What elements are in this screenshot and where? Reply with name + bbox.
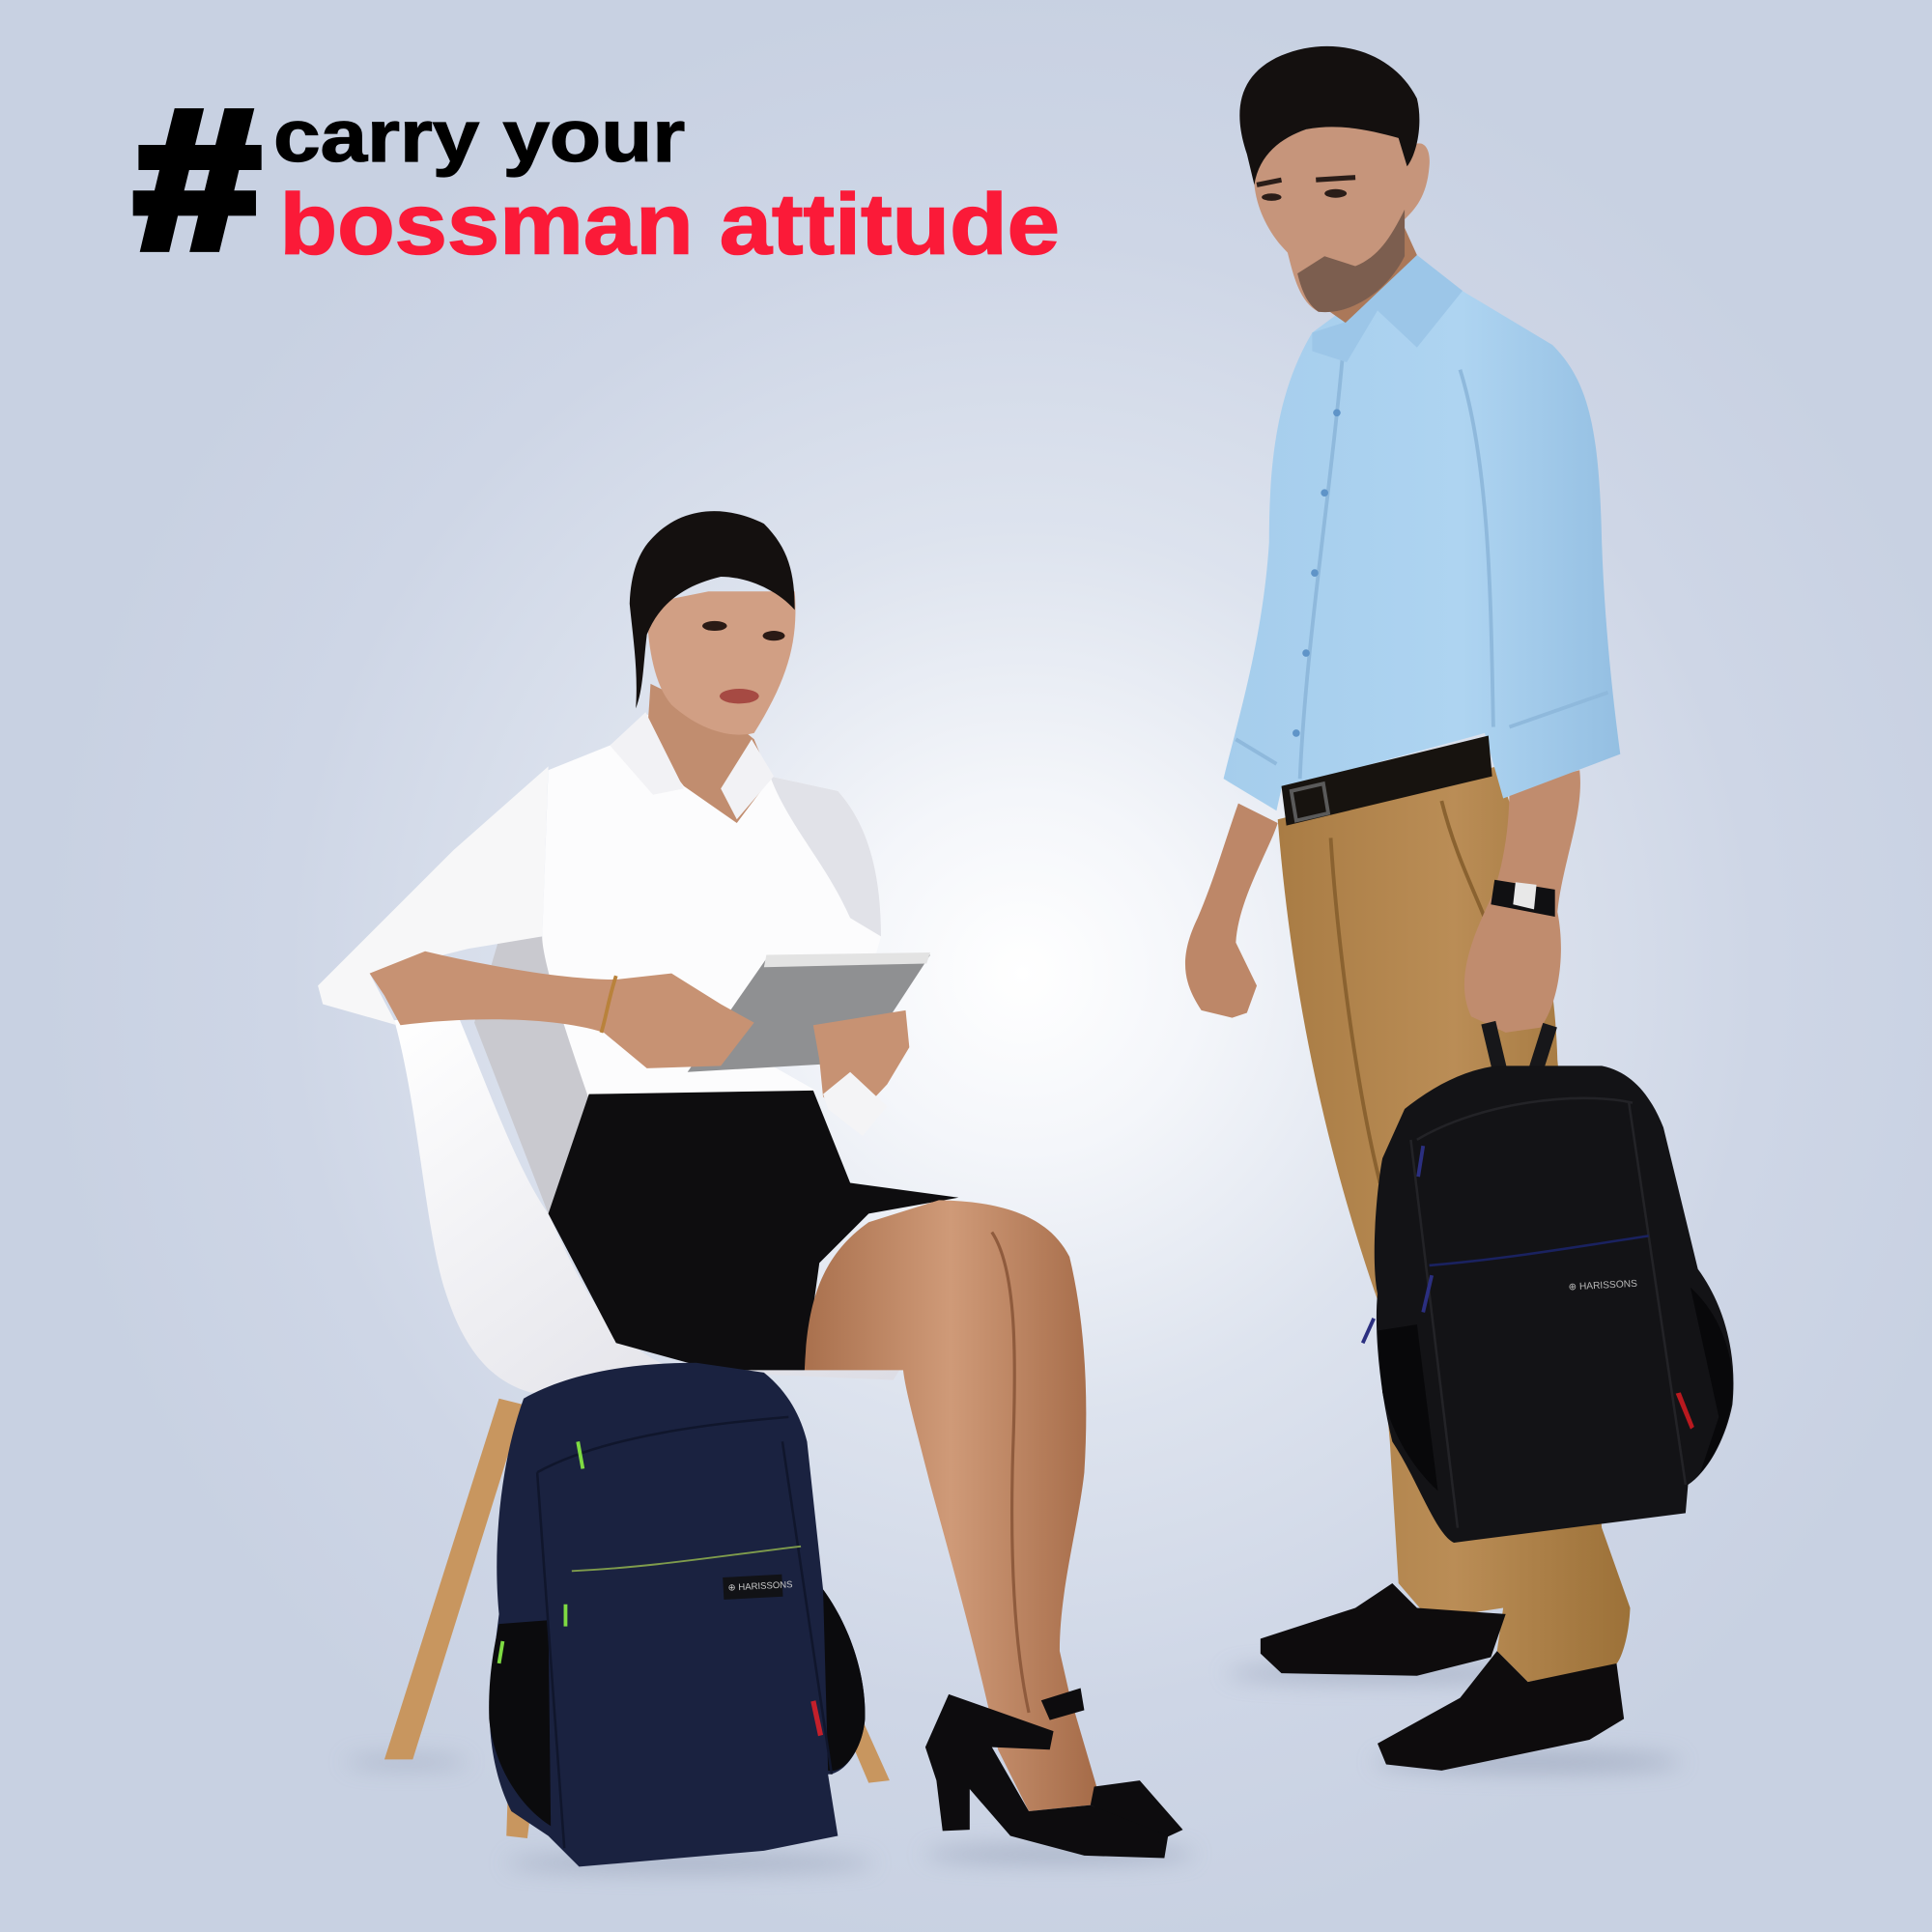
belt buckle bbox=[1292, 783, 1328, 820]
backpack: black bbox=[1363, 1023, 1733, 1543]
logo: ⊕ HARISSONS bbox=[1568, 1279, 1637, 1293]
side mesh pockets bbox=[489, 1620, 551, 1826]
bag body bbox=[490, 1363, 865, 1866]
trouser pocket and crease bbox=[1331, 801, 1485, 1182]
shirt bbox=[542, 715, 881, 1099]
man bbox=[1185, 46, 1733, 1771]
hair bbox=[1239, 46, 1419, 185]
bracelet bbox=[601, 976, 616, 1033]
title: # bbox=[135, 71, 259, 288]
front seams bbox=[1410, 1098, 1686, 1528]
shirt bbox=[1224, 255, 1620, 810]
blue zip bbox=[1430, 1236, 1649, 1265]
logo bbox=[723, 1575, 793, 1600]
title bbox=[135, 71, 1060, 288]
collar bbox=[1312, 255, 1463, 362]
beard bbox=[1297, 210, 1405, 312]
eyes and lips bbox=[702, 621, 784, 703]
chair shell back bbox=[474, 936, 589, 1213]
handle bbox=[1489, 1023, 1550, 1074]
bare forearm and left hand bbox=[370, 952, 754, 1068]
right hand bbox=[813, 1010, 909, 1123]
red tag bbox=[810, 1700, 823, 1736]
title: carry your bbox=[273, 96, 685, 178]
right cuff bbox=[823, 1072, 887, 1136]
face bbox=[1254, 124, 1430, 312]
front arm and hand bbox=[1464, 770, 1580, 1033]
bag body bbox=[1375, 1065, 1733, 1543]
neck and chest bbox=[647, 684, 770, 823]
shoes bbox=[925, 1688, 1182, 1858]
backpack: navy bbox=[489, 1363, 865, 1866]
red tag bbox=[1676, 1392, 1694, 1430]
zip pulls bbox=[499, 1441, 582, 1663]
tablet bbox=[688, 955, 930, 1072]
back arm in shirt bbox=[318, 766, 549, 1025]
zip pulls bbox=[1363, 1146, 1432, 1343]
back arm bbox=[1185, 804, 1278, 1018]
shirt buttons bbox=[1293, 409, 1341, 737]
shirt shadow bbox=[770, 777, 881, 936]
green zip bbox=[572, 1547, 801, 1571]
face bbox=[647, 591, 795, 735]
front seams bbox=[537, 1417, 832, 1848]
trousers bbox=[1278, 766, 1631, 1682]
eyes and brows bbox=[1257, 178, 1355, 185]
collar bbox=[610, 712, 774, 819]
knee crease bbox=[992, 1233, 1029, 1713]
chair wooden legs bbox=[384, 1399, 890, 1838]
shirt creases bbox=[1236, 352, 1608, 779]
neck bbox=[1324, 228, 1417, 323]
title: bossman attitude bbox=[280, 176, 1060, 272]
chair shell bbox=[394, 1016, 899, 1393]
legs bbox=[805, 1200, 1096, 1811]
skirt bbox=[549, 1091, 958, 1370]
watch bbox=[1491, 880, 1555, 917]
hair bbox=[630, 511, 795, 708]
side mesh pockets bbox=[1378, 1324, 1438, 1491]
floor shadows bbox=[345, 1664, 1682, 1872]
woman seated on chair bbox=[318, 511, 1182, 1866]
logo: ⊕ HARISSONS bbox=[727, 1579, 793, 1594]
shoes bbox=[1261, 1583, 1506, 1676]
belt bbox=[1282, 735, 1492, 826]
